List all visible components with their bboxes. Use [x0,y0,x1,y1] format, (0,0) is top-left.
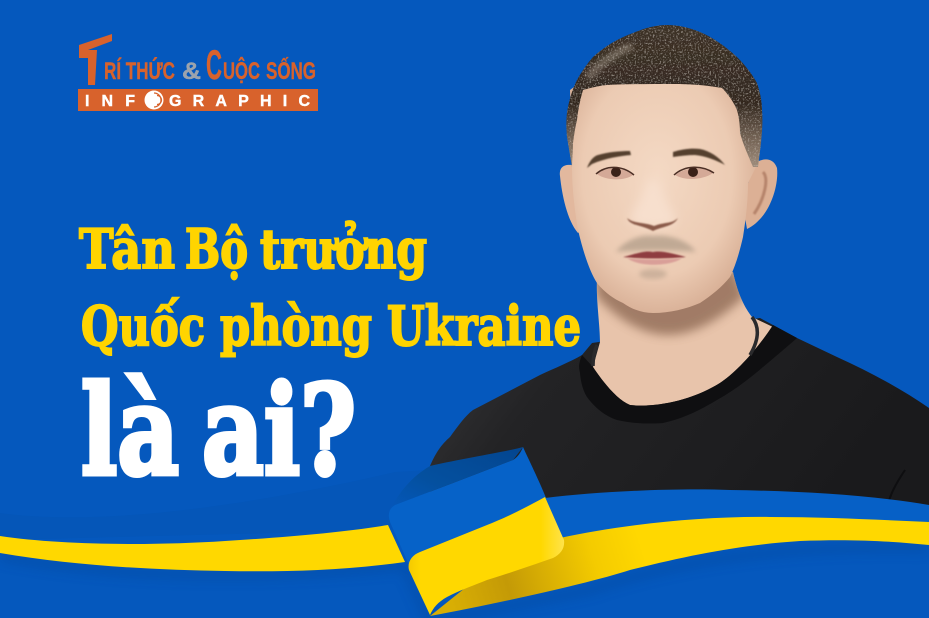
necklace [593,317,757,366]
title line 3: ai? [202,359,356,504]
ribbon shadow [0,548,929,618]
moustache [616,236,696,252]
logo: Tri Thuc & Cuoc Song Infographic: GRAPHIC [169,93,310,110]
title line 3 [81,359,356,504]
logo wordmark: UỘC [223,57,260,85]
ribbon: left band soft shade [0,470,430,540]
ribbon: dark fold behind flag [388,447,523,512]
flag yellow stripe [409,497,564,615]
flag: Ukraine flag fold [389,447,564,615]
logo wordmark: & [182,58,201,85]
logo wordmark [104,41,316,88]
title line 1: Tân [79,217,175,281]
chin stubble [639,269,667,279]
title line 1: Bộ [185,217,248,281]
flag blue stripe [389,447,546,565]
hair [566,25,762,167]
neck shadow under chin [596,270,745,335]
logo wordmark: RÍ THỨC [104,57,175,85]
neck [593,272,773,406]
lips [623,251,686,265]
logo: Tri Thuc & Cuoc Song Infographic [78,34,318,111]
person portrait [430,25,929,520]
logo icon: roof T [79,34,112,85]
ear right [742,159,777,229]
sleeve seam [888,470,905,505]
title line 2: Quốc [81,294,205,358]
title line 3: là [81,359,179,504]
nose [627,180,678,231]
logo: Tri Thuc & Cuoc Song Infographic: INF [85,93,135,110]
eyes [596,167,714,179]
shirt [430,318,929,520]
ribbon: right yellow band [430,517,929,616]
title line 1 [79,217,427,281]
title line 2 [81,294,581,358]
logo circle icon [144,90,164,110]
ear left [560,165,586,233]
title [79,217,581,504]
eyebrows [587,149,725,168]
logo wordmark: C [206,41,222,88]
logo infographic bar [78,89,318,111]
hair highlight left [588,46,632,78]
title line 2: phòng [220,294,372,358]
logo wordmark: SỐNG [266,57,316,85]
title line 2: Ukraine [387,294,581,358]
face [570,60,756,313]
shirt collar [579,325,797,424]
ribbon: left yellow band [0,525,405,571]
ribbon: right blue band [545,489,929,545]
title line 1: trưởng [260,217,427,281]
